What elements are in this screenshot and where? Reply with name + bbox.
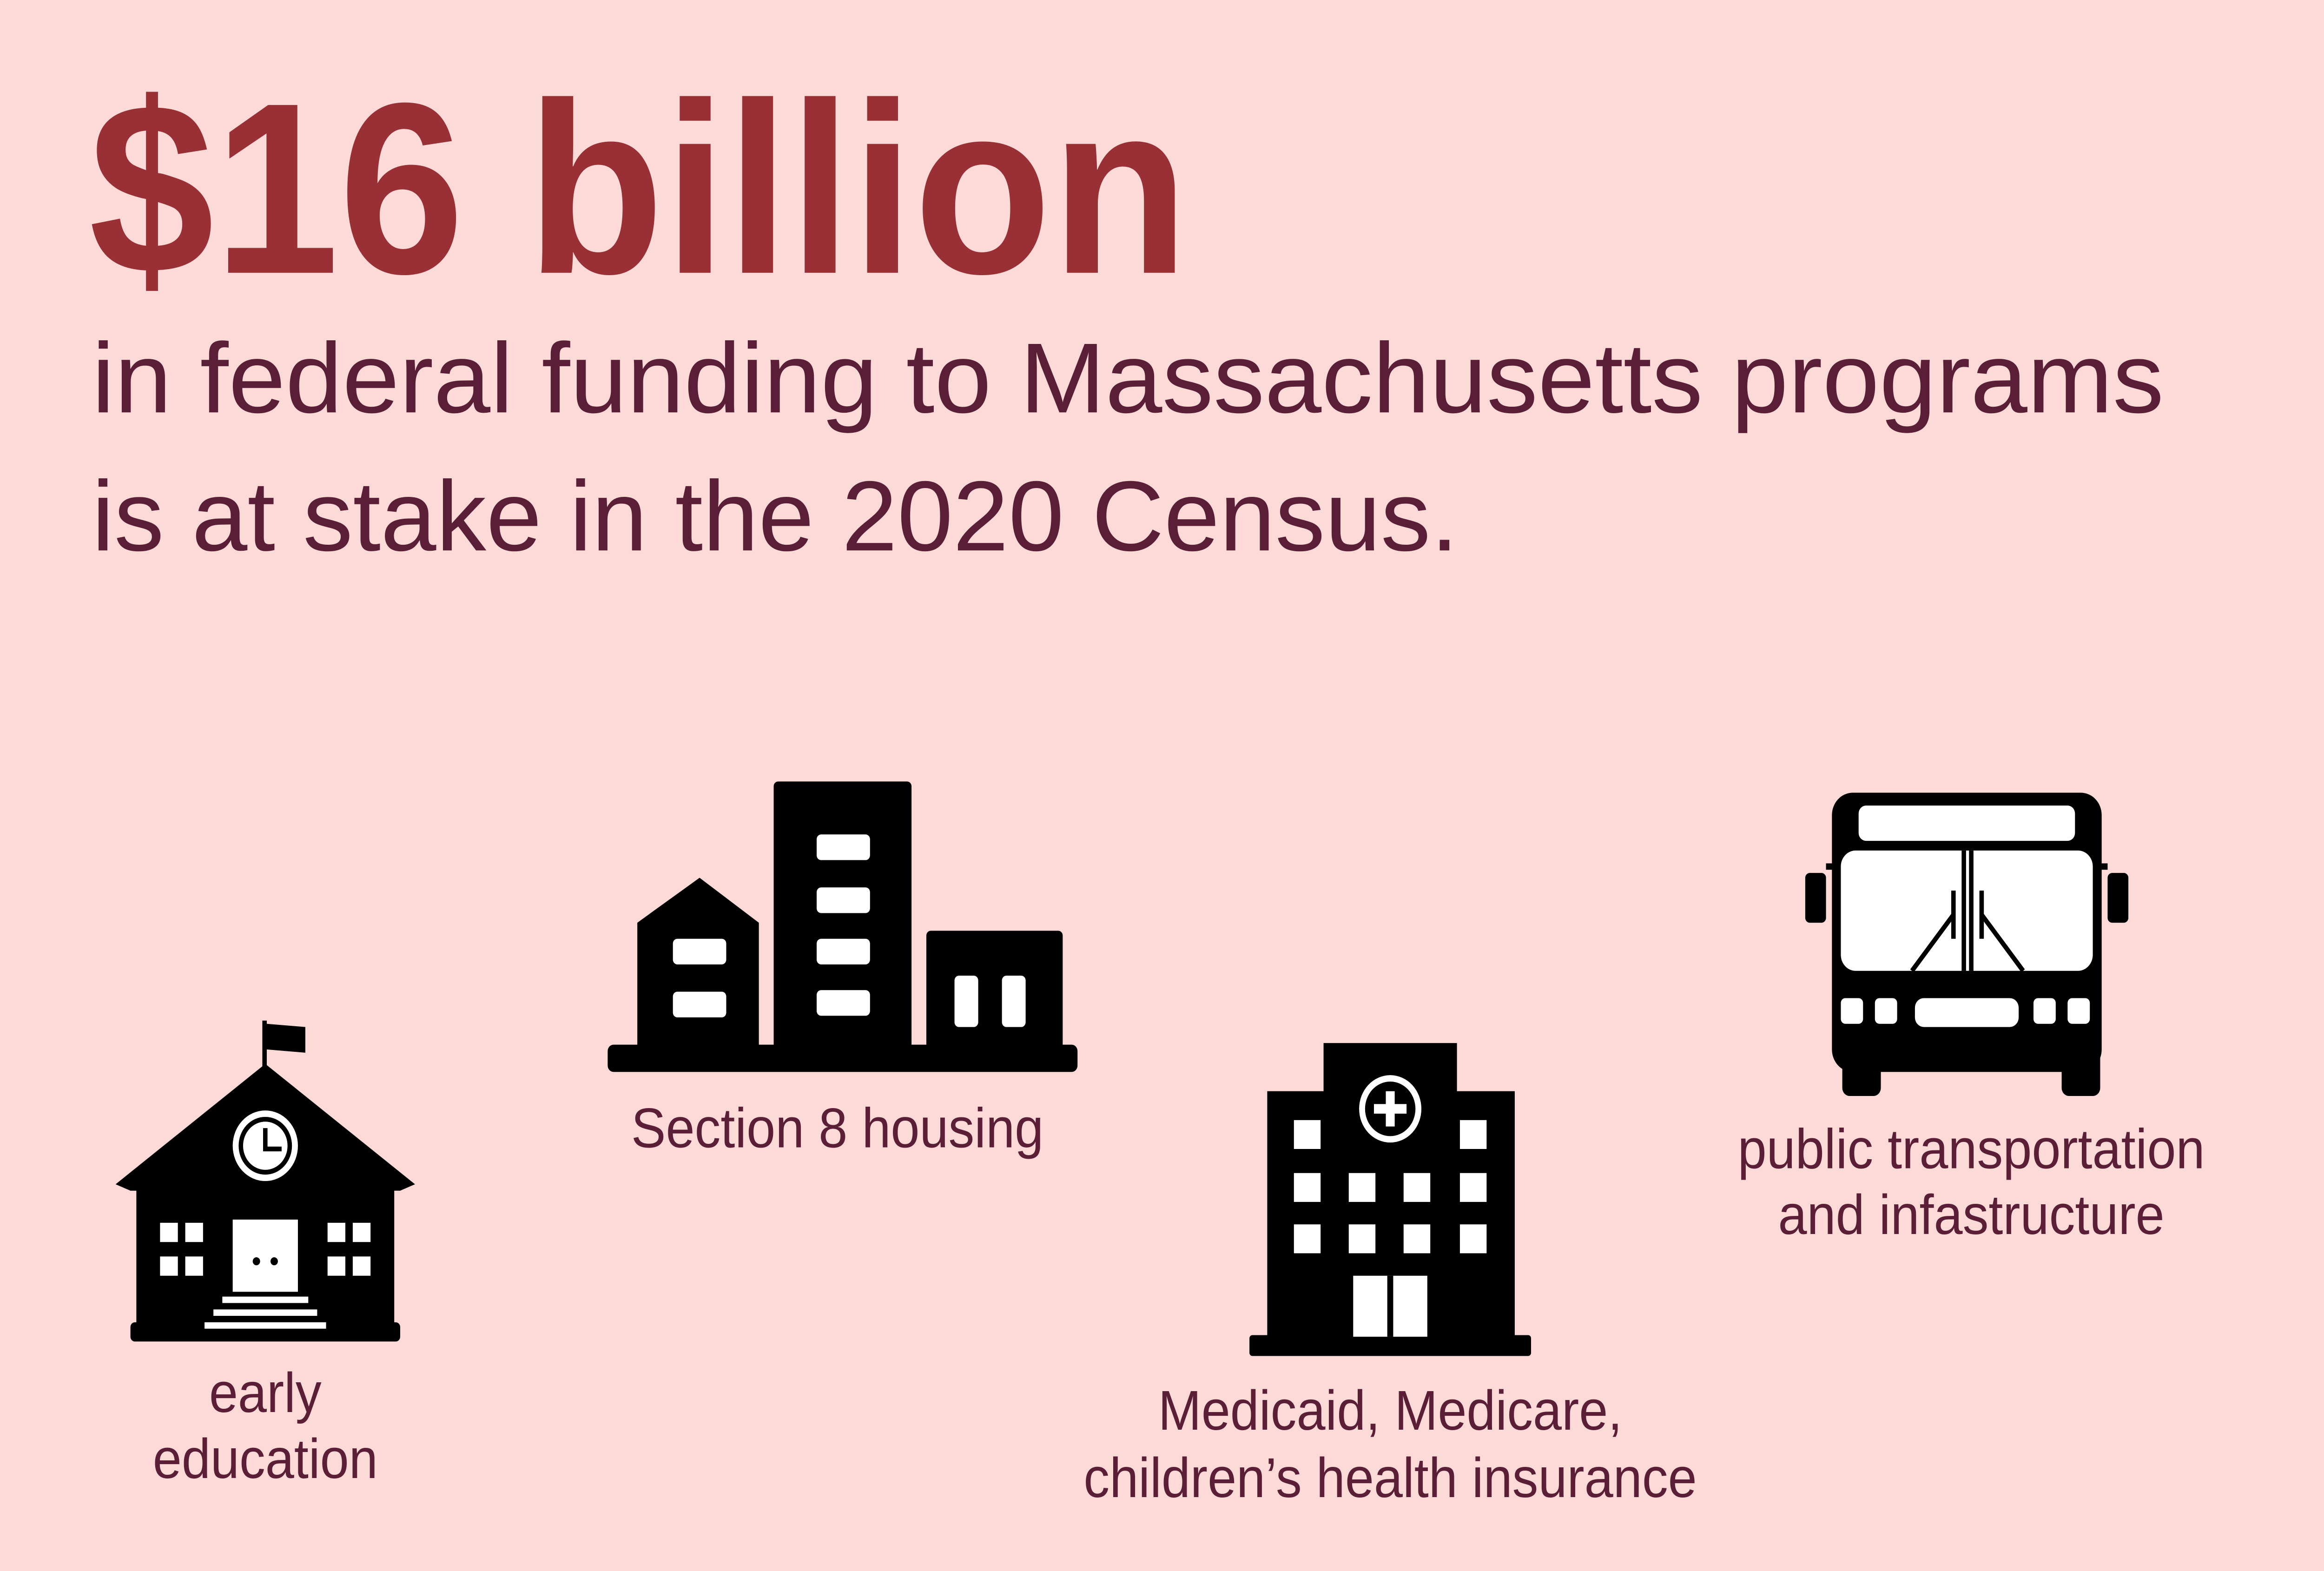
icon: bus (1805, 793, 2128, 1096)
label: early education (153, 1361, 378, 1490)
label: Medicaid: children’s health insurance (1083, 1446, 1697, 1509)
label: public transportation: public transportation (1738, 1117, 2205, 1180)
icon: hospital (1249, 1043, 1531, 1356)
label: Section 8 housing: Section 8 housing (631, 1096, 1043, 1160)
subtitle (92, 322, 2164, 572)
label: Medicaid: Medicaid, Medicare, (1158, 1379, 1622, 1442)
label: Medicaid (1083, 1379, 1697, 1509)
label: early education: education (153, 1427, 378, 1490)
icon: housing buildings (607, 781, 1077, 1072)
label: public transportation: and infastructure (1778, 1183, 2165, 1246)
subtitle: is at stake in the 2020 Census. (92, 460, 1459, 572)
subtitle: in federal funding to Massachusetts programs (92, 322, 2164, 434)
icon: school (116, 1021, 415, 1341)
label: public transportation (1738, 1117, 2205, 1246)
title: $16 billion (89, 53, 1188, 325)
label: early education: early (209, 1361, 322, 1424)
